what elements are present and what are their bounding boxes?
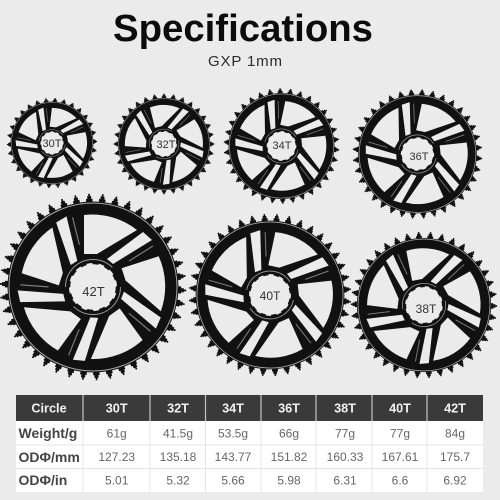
table row: weight: Weight/g	[18, 425, 77, 441]
chainring 34T: 34T	[273, 140, 292, 152]
table header row: 42T	[444, 402, 466, 416]
table row: weight: 61g	[107, 426, 127, 440]
table row: weight: 53.5g	[218, 426, 248, 440]
table row: weight: 84g	[445, 426, 465, 440]
table header row: 34T	[222, 402, 244, 416]
table header row: 38T	[334, 402, 356, 416]
table row: outer diameter inches: 6.6	[392, 474, 409, 488]
table row: outer diameter inches: 6.31	[333, 474, 357, 488]
chainring 38T: 38T	[416, 302, 437, 316]
table row: outer diameter mm: 151.82	[271, 450, 308, 464]
subtitle: GXP 1mm	[208, 53, 282, 70]
table row: outer diameter inches: 6.92	[443, 474, 467, 488]
chainring 36T	[341, 78, 493, 231]
table row: outer diameter inches	[18, 472, 467, 488]
table row: outer diameter inches: 5.66	[221, 474, 245, 488]
chainring 42T	[1, 195, 185, 381]
table row: outer diameter mm: 175.7	[440, 450, 470, 464]
table row: weight: 77g	[390, 426, 410, 440]
table row: outer diameter mm	[18, 449, 470, 465]
chainring 36T: 36T	[410, 151, 429, 163]
title: Specifications	[113, 8, 373, 50]
chainring 38T	[339, 220, 500, 391]
table row: outer diameter mm: 135.18	[160, 450, 197, 464]
table row: weight: 41.5g	[163, 426, 193, 440]
table header row: 32T	[167, 402, 189, 416]
chainring 32T	[104, 84, 224, 205]
table row: outer diameter inches: 5.01	[105, 474, 129, 488]
table row: outer diameter inches: 5.32	[166, 474, 190, 488]
table header row: 40T	[389, 402, 411, 416]
table row: weight	[18, 425, 465, 441]
chainring 42T: 42T	[82, 284, 105, 299]
table header row: 30T	[106, 402, 128, 416]
chainring 30T: 30T	[43, 138, 62, 150]
chainring 40T	[175, 200, 365, 392]
table row: outer diameter inches: ODΦ/in	[18, 472, 67, 488]
table row: outer diameter mm: 127.23	[98, 450, 135, 464]
table header row: 36T	[278, 402, 300, 416]
table row: outer diameter mm: ODΦ/mm	[18, 449, 80, 465]
table row: outer diameter mm: 143.77	[215, 450, 252, 464]
table header row: Circle	[31, 402, 67, 416]
table header row	[31, 402, 466, 416]
specifications table	[16, 395, 483, 492]
table row: outer diameter inches: 5.98	[277, 474, 301, 488]
chainring 40T: 40T	[260, 289, 281, 303]
table row: outer diameter mm: 160.33	[327, 450, 364, 464]
table row: weight: 77g	[335, 426, 355, 440]
table row: weight: 66g	[279, 426, 299, 440]
chainring 32T: 32T	[157, 139, 176, 151]
chainring 34T	[214, 78, 349, 215]
table row: outer diameter mm: 167.61	[382, 450, 419, 464]
chainring 30T	[2, 93, 102, 194]
